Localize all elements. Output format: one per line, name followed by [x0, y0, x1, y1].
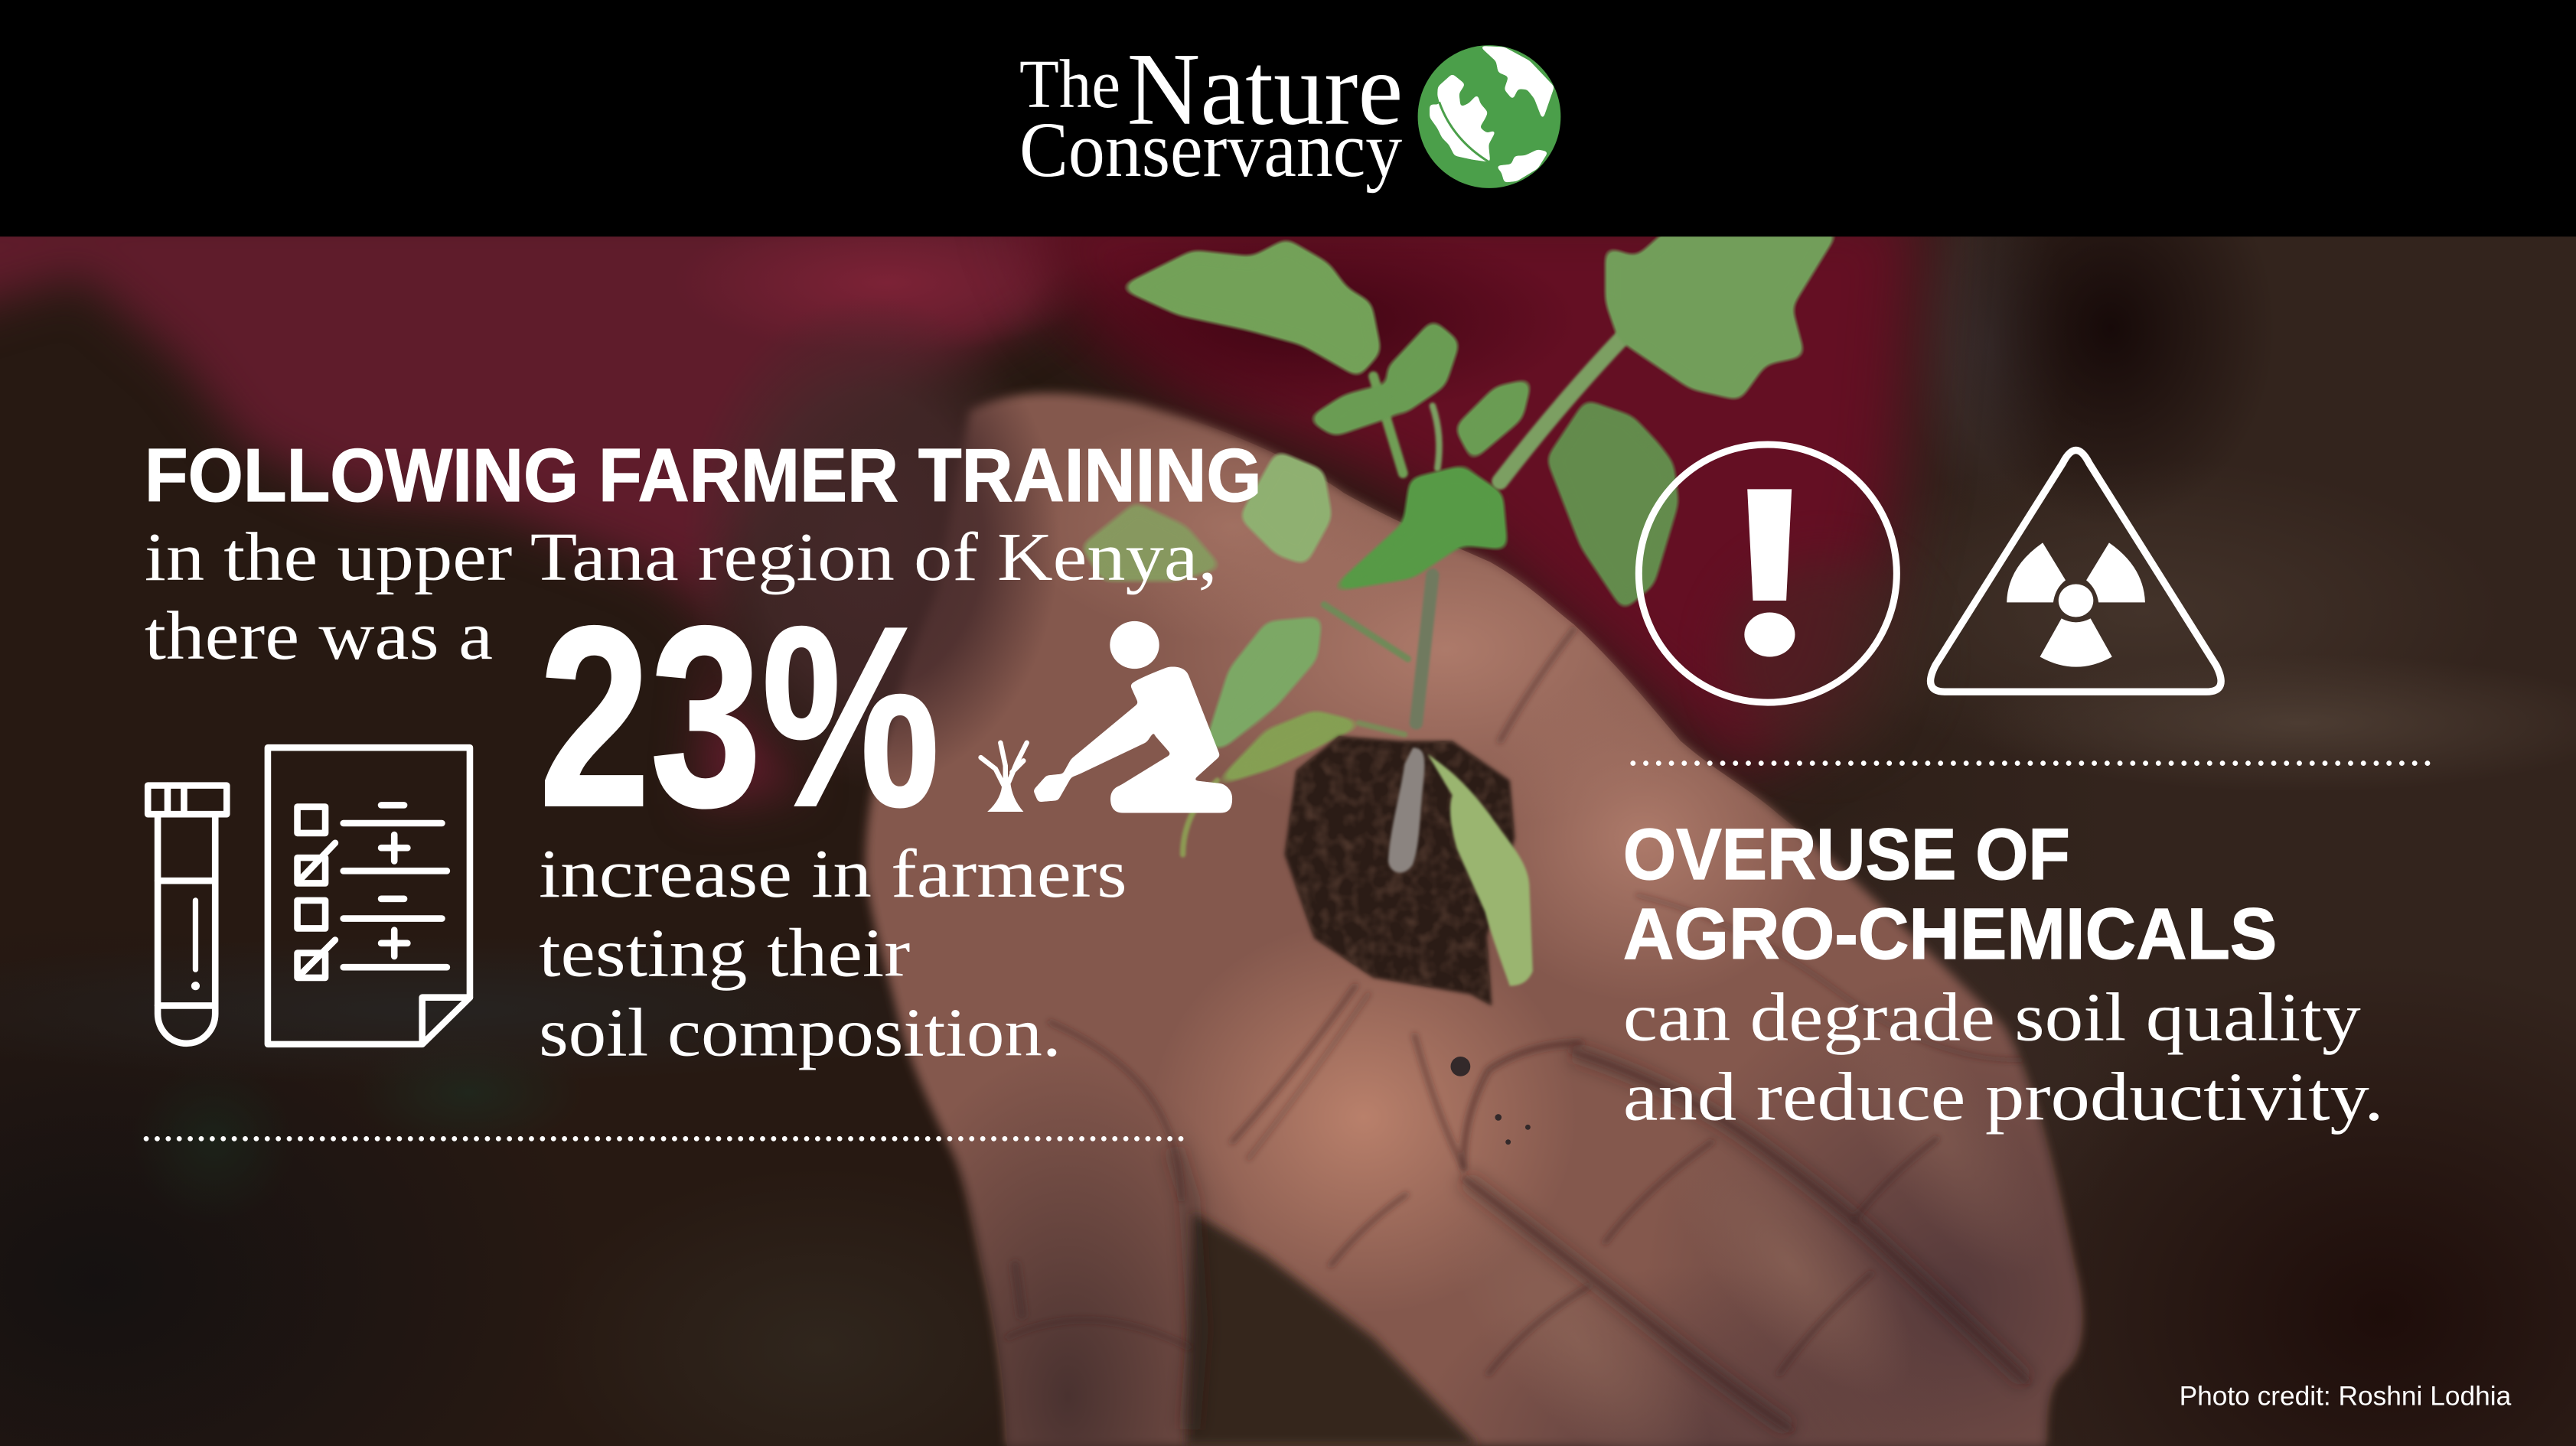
icon: test tube [148, 786, 227, 1044]
stat: 23%: 23% [539, 573, 940, 859]
text: there was a: there was a [145, 598, 493, 674]
text: increase in farmers testing their soil composition: increase in farmers [539, 835, 1127, 912]
right text block: agro-chemicals [1623, 814, 2384, 1135]
farmer body [1110, 667, 1232, 813]
icon: farmer planting seedling [981, 621, 1232, 813]
logo wordmark: The [1019, 46, 1120, 122]
heading: following farmer training: FOLLOWING FARMER TRAINING [145, 433, 1262, 517]
icon: soil test checklist [268, 747, 470, 1044]
text: increase in farmers testing their soil composition: soil composition. [539, 995, 1061, 1071]
icon: radiation hazard triangle [1931, 450, 2221, 692]
left text block: farmer training [145, 433, 1262, 1071]
heading: overuse of agro-chemicals: OVERUSE OF [1623, 814, 2070, 895]
divider: right dotted line [1633, 762, 2431, 764]
heading: overuse of agro-chemicals [1623, 814, 2277, 975]
divider: left dotted line [146, 1138, 1183, 1140]
logo: The Nature Conservancy [1019, 32, 1560, 194]
text: increase in farmers testing their soil composition [539, 835, 1127, 1071]
photo: palm and finger creases [1007, 630, 2027, 1430]
logo wordmark: Nature [1127, 32, 1403, 147]
photo: skin shading [964, 429, 2079, 1446]
icon: exclamation in circle [1639, 445, 1896, 702]
photo: gap between fingers [1186, 1213, 1479, 1446]
photo: hand [713, 321, 2088, 1446]
photo: dirt specks [1451, 1057, 1531, 1145]
photo: seedling stems and leaves [1078, 230, 1840, 855]
photo: forearm shadow [682, 296, 1060, 789]
photo: red shirt [0, 197, 1922, 805]
logo wordmark [1019, 32, 1403, 194]
logo wordmark: Conservancy [1019, 106, 1403, 194]
text: increase in farmers testing their soil composition: testing their [539, 915, 910, 992]
header bar [0, 0, 2576, 236]
text: degrade soil quality: and reduce productivity. [1623, 1059, 2384, 1135]
photo: soil plug [1285, 736, 1533, 1005]
seedling [981, 743, 1027, 812]
farmer head [1110, 621, 1159, 669]
logo: green globe with oak leaf [1418, 45, 1560, 188]
heading: overuse of agro-chemicals: AGRO-CHEMICALS [1623, 894, 2277, 975]
photo: finger shadows [1173, 1052, 2027, 1430]
photo credit: Photo credit: Roshni Lodhia [2180, 1380, 2512, 1411]
farmer arm and spade [1033, 686, 1167, 802]
text: degrade soil quality [1623, 979, 2384, 1135]
text: region line: in the upper Tana region of Kenya, [145, 519, 1218, 595]
text: degrade soil quality: can degrade soil quality [1623, 979, 2361, 1056]
photo: hand holding seedling [0, 236, 2088, 1446]
